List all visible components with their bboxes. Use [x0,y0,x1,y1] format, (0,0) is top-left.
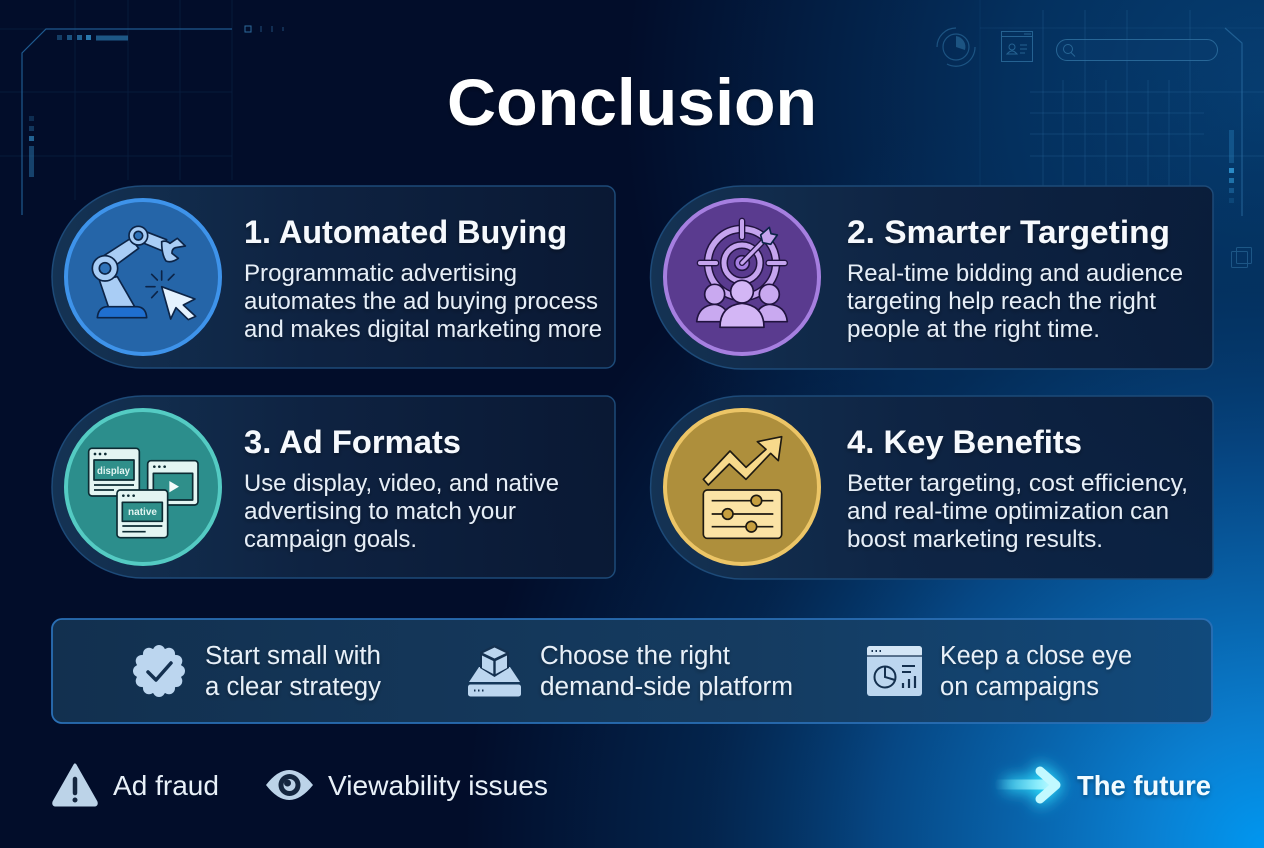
body text: Better targeting, cost efficiency, [847,470,1188,497]
panel: smarter targeting [650,186,1213,369]
body text: and makes digital marketing more [244,316,602,343]
panel: ad formats [52,396,615,578]
body text [847,260,1183,343]
label: ad fraud: Ad fraud [113,770,219,801]
body text: targeting help reach the right [847,288,1156,315]
icon: faint profile window [1001,32,1033,62]
body text: advertising to match your [244,498,516,525]
icon: analytics window [867,646,922,696]
body text: Programmatic advertising [244,260,517,287]
bar background [52,619,1212,723]
card background [650,186,1213,369]
icon: faint dial [937,28,975,66]
icon: platform with cube [468,645,521,696]
body text [244,470,559,553]
body text: campaign goals. [244,526,417,553]
icon: faint layered squares [1232,248,1252,268]
label: the future: The future [1077,770,1211,801]
label: native: native [128,507,157,518]
text: start small: Start small with [205,642,381,670]
text: start small: a clear strategy [205,673,381,701]
label: display: display [97,465,130,477]
text: start small [205,642,381,701]
body text: Use display, video, and native [244,470,559,497]
title: Conclusion [447,65,817,139]
icon: eye [266,770,313,800]
text: choose platform [540,642,793,701]
body text: people at the right time. [847,316,1100,343]
body text: boost marketing results. [847,526,1103,553]
text: choose platform: Choose the right [540,642,730,670]
icon circle: robot arm and cursor [66,200,220,354]
card background [52,396,615,578]
body text [244,260,602,343]
icon circle: target and audience [665,200,819,354]
arrow: the future [995,771,1056,799]
text: choose platform: demand-side platform [540,673,793,701]
top-right tech grid and icons [937,0,1264,268]
panel: key benefits [651,396,1213,579]
card background [651,396,1213,579]
body text: automates the ad buying process [244,288,598,315]
body text: and real-time optimization can [847,498,1169,525]
search bar [1056,40,1218,60]
heading: 3. Ad Formats [244,424,461,460]
icon: warning triangle [54,765,96,805]
heading: 4. Key Benefits [847,424,1082,460]
icon circle: ad format windows [66,410,220,564]
label: viewability issues: Viewability issues [328,770,548,801]
heading: 1. Automated Buying [244,214,567,250]
icon circle: growth arrow and sliders [665,410,819,564]
text: keep an eye: Keep a close eye [940,642,1132,670]
text: keep an eye [940,642,1132,701]
icon: check badge [133,645,185,697]
body text: Real-time bidding and audience [847,260,1183,287]
heading: 2. Smarter Targeting [847,214,1170,250]
top-left tech frame [0,0,283,215]
card background [52,186,615,368]
panel: recommendations bar [52,619,1212,723]
text: keep an eye: on campaigns [940,673,1099,701]
body text [847,470,1188,553]
panel: automated buying [52,186,615,368]
